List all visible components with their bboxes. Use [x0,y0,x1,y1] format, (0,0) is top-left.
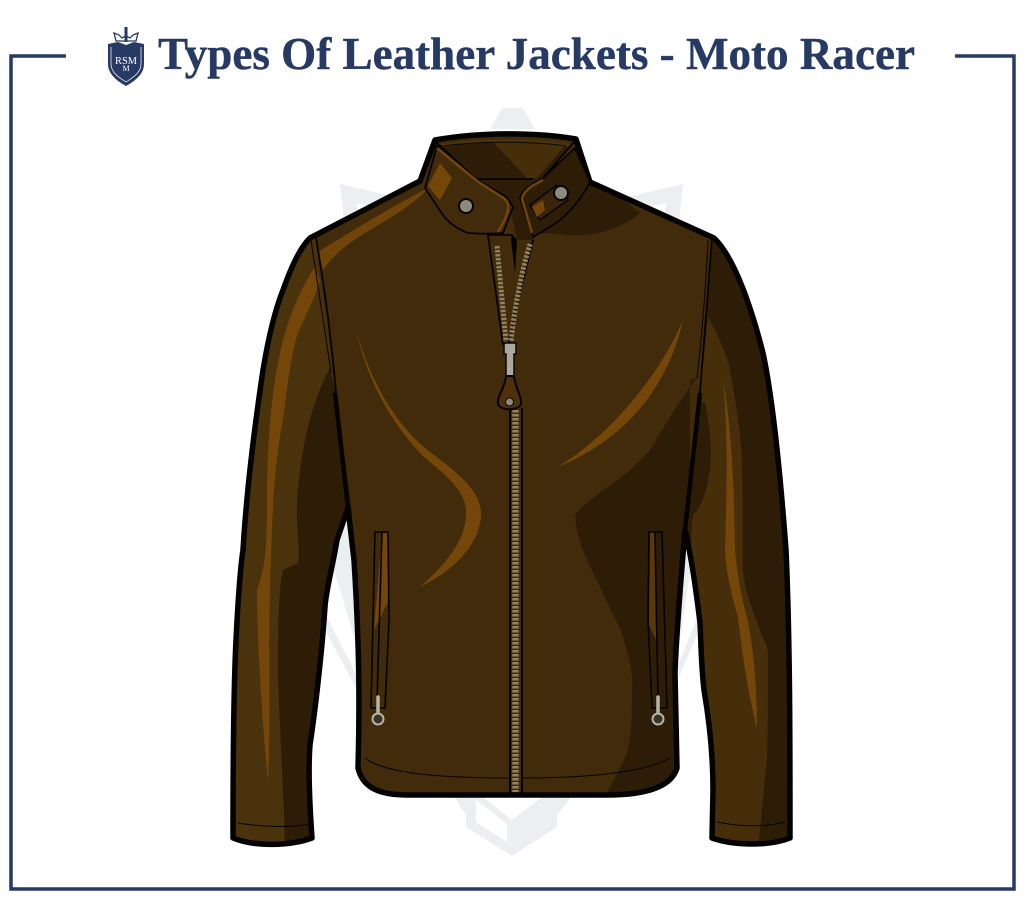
left sleeve highlight [257,268,320,782]
left collar flap [425,146,513,234]
jacket [225,134,800,850]
left pocket [371,532,389,724]
lower teeth [512,410,519,792]
collar inside [439,139,571,240]
placket wedge [511,234,517,273]
right pocket [648,532,667,724]
highlight: left chest [356,330,481,587]
highlight: right chest [558,320,683,467]
watermark shield [325,108,699,856]
collar snap left [459,199,473,213]
right sleeve dark [690,241,788,841]
jacket base [233,134,790,844]
zipper pull [504,343,516,376]
logo crest [108,27,144,86]
collar strap [530,185,568,220]
jacket outline [233,134,790,844]
shoulder highlight [318,188,428,270]
collar [425,139,590,240]
left sleeve dark patch [278,368,352,850]
right sleeve highlight [723,380,757,728]
collar snap right [554,186,568,200]
upper teeth [497,244,530,342]
logo crest: RSM [115,56,138,67]
title: Types Of Leather Jackets - Moto Racer [158,28,915,79]
sleeve seams [238,238,785,827]
neck shadow on right chest [542,185,640,236]
right sleeve seam shadow [692,402,711,516]
logo crest: M [122,64,130,73]
right collar flap [520,148,590,237]
left sleeve tone [236,239,333,842]
right sleeve mid tone [690,317,768,850]
centre zipper [488,234,533,794]
chest lower right shadow [575,377,697,800]
